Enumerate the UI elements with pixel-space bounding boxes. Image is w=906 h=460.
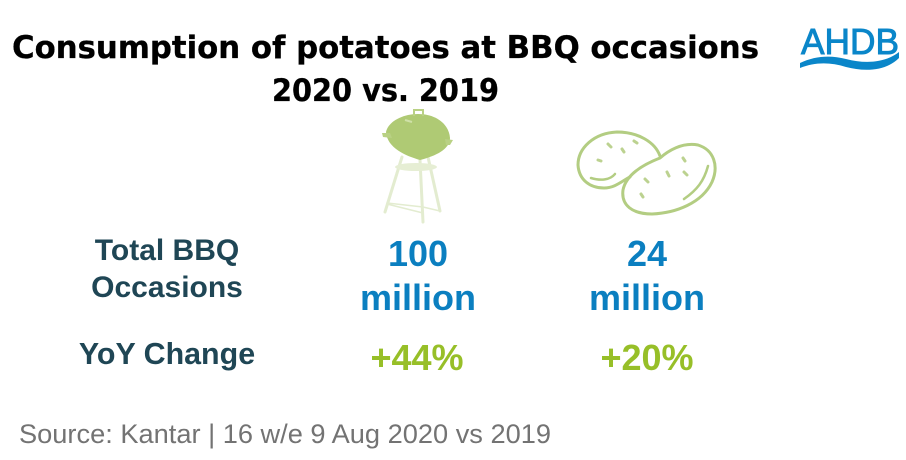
value: 100 million: 100 bbox=[388, 233, 448, 274]
row label: Total BBQ Occasions: Total BBQ bbox=[95, 234, 239, 267]
icon: potatoes bbox=[578, 132, 715, 214]
value: 24 million bbox=[589, 233, 705, 318]
value: 24 million: million bbox=[589, 277, 705, 318]
row label: Total BBQ Occasions: Occasions bbox=[91, 271, 243, 304]
value: +44%: +44% bbox=[370, 337, 464, 378]
logo: AHDB: AHDB bbox=[801, 21, 899, 62]
row label: Total BBQ Occasions bbox=[91, 234, 243, 304]
value: 100 million bbox=[360, 233, 476, 318]
row label: YoY Change: YoY Change bbox=[79, 337, 255, 371]
value: 100 million: million bbox=[360, 277, 476, 318]
value: 24 million: 24 bbox=[627, 233, 667, 274]
title: Consumption of potatoes at BBQ occasions bbox=[12, 30, 759, 66]
title: 2020 vs. 2019 bbox=[272, 73, 499, 109]
value: +20%: +20% bbox=[600, 337, 694, 378]
icon: barbecue grill bbox=[382, 110, 453, 222]
source note: Source: Kantar | 16 w/e 9 Aug 2020 vs 2019 bbox=[19, 419, 551, 449]
title bbox=[12, 30, 759, 109]
